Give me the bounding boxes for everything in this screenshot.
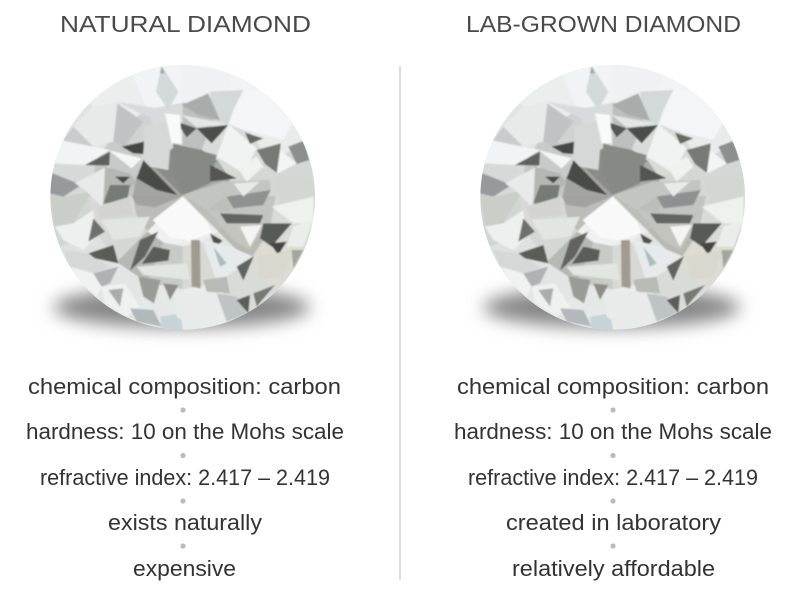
list: lab-grown diamond properties: relatively affordable xyxy=(512,556,715,581)
panel: natural diamond xyxy=(26,11,344,581)
list: natural diamond properties: hardness: 10 on the Mohs scale xyxy=(26,419,344,444)
list: natural diamond properties: chemical composition: carbon xyxy=(28,374,341,399)
list: natural diamond properties: exists naturally xyxy=(108,510,262,535)
panel: lab-grown diamond xyxy=(454,11,772,581)
list: lab-grown diamond properties xyxy=(454,374,772,581)
image: natural diamond with shadow xyxy=(43,56,323,336)
divider between columns xyxy=(400,66,401,580)
list: lab-grown diamond properties: refractive index: 2.417 – 2.419 xyxy=(468,465,758,490)
list: natural diamond properties: refractive index: 2.417 – 2.419 xyxy=(40,465,330,490)
list: natural diamond properties: expensive xyxy=(133,556,236,581)
heading: natural diamond: NATURAL DIAMOND xyxy=(60,11,311,37)
image: lab-grown diamond with shadow xyxy=(473,56,753,336)
list: lab-grown diamond properties: hardness: 10 on the Mohs scale xyxy=(454,419,772,444)
list: lab-grown diamond properties: chemical composition: carbon xyxy=(457,374,769,399)
heading: lab-grown diamond: LAB-GROWN DIAMOND xyxy=(466,11,741,37)
list: natural diamond properties xyxy=(26,374,344,581)
list: lab-grown diamond properties: created in laboratory xyxy=(506,510,721,535)
